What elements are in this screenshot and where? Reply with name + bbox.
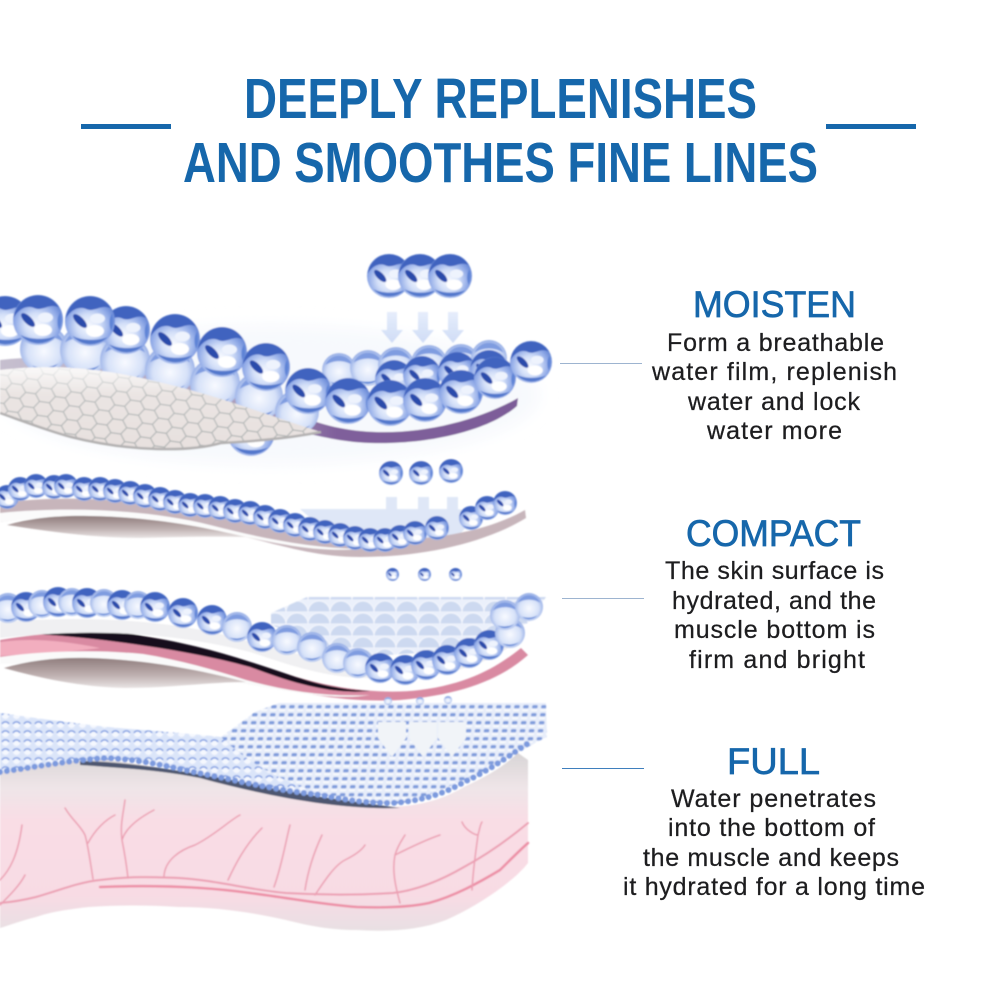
falling beads [379, 459, 463, 485]
leader line: full [562, 768, 644, 769]
left pink highlight [0, 640, 100, 656]
white upper band [0, 619, 520, 678]
text block: compact [665, 513, 884, 674]
body: moisten: water film, replenish [651, 358, 897, 386]
back rows of beads [20, 325, 508, 434]
body: compact: The skin surface is [665, 557, 884, 585]
body: moisten: Form a breathable [667, 329, 884, 357]
body: full: Water penetrates [671, 785, 876, 813]
heading: full: FULL [727, 741, 820, 782]
layer 2: compact beads on film [0, 459, 526, 557]
body: compact: muscle bottom is [674, 616, 875, 644]
falling water beads [367, 254, 472, 298]
droplet under film [227, 408, 275, 456]
text block: full [623, 741, 925, 901]
front row of large beads [0, 295, 552, 426]
body: compact: hydrated, and the [672, 587, 876, 615]
down arrows [381, 312, 464, 343]
bead row [0, 474, 517, 552]
muscle lens [4, 658, 246, 688]
leader line: moisten [560, 363, 642, 364]
text block: moisten [651, 284, 897, 445]
title: AND SMOOTHES FINE LINES [183, 131, 818, 195]
blood vessels [0, 800, 528, 907]
title: DEEPLY REPLENISHES [244, 67, 757, 131]
small falling beads [386, 568, 462, 581]
title rule right [826, 124, 916, 129]
body: moisten [651, 329, 897, 445]
heading: compact: COMPACT [686, 513, 861, 554]
tiny falling beads [384, 696, 452, 705]
title [183, 67, 818, 195]
lower pink film [0, 632, 528, 701]
body: compact [665, 557, 884, 674]
heading: moisten: MOISTEN [693, 284, 856, 325]
left mesh film [0, 713, 400, 803]
black gap [36, 630, 370, 692]
skin layer illustration [0, 254, 552, 931]
hexagon film [0, 362, 325, 454]
body: full: the muscle and keeps [643, 844, 899, 872]
shadow under mesh [80, 761, 400, 808]
title rule left [81, 124, 171, 129]
layer 3: scaled water film with dark gap [0, 568, 546, 701]
white band lower [0, 651, 370, 697]
layer 4: skin block with mesh and blood vessels [0, 696, 547, 931]
white band [0, 510, 360, 550]
layer 1: surface film with large water beads [0, 254, 552, 465]
purple base film [0, 357, 518, 443]
leader line: compact [562, 598, 644, 599]
skin block [0, 753, 528, 931]
mauve film [0, 499, 526, 557]
body: moisten: water more [706, 417, 842, 445]
white arrows [378, 722, 466, 757]
translucent panel and arrows [300, 497, 480, 545]
beaded lower edge of mesh [0, 742, 530, 803]
right mesh film [221, 703, 547, 804]
body: moisten: water and lock [687, 388, 860, 416]
body: full: it hydrated for a long time [623, 873, 925, 901]
soft glow [0, 325, 540, 465]
scale sheet [271, 597, 546, 657]
muscle lens [7, 516, 246, 538]
bead row [0, 587, 543, 685]
body: compact: firm and bright [689, 646, 865, 674]
body: full [623, 785, 925, 901]
body: full: into the bottom of [668, 814, 875, 842]
